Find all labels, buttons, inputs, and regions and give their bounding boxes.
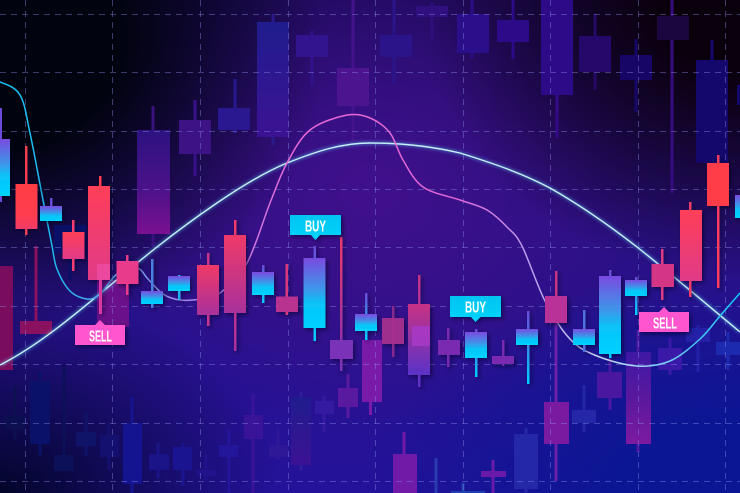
candle: small cyan 2 (141, 259, 163, 308)
candle: right edge cyan (735, 195, 740, 218)
candle: small cyan 1 (40, 198, 62, 221)
candle: magenta short (276, 264, 298, 315)
candle: pink 1 (62, 220, 84, 271)
candle: cyan under second buy (465, 329, 487, 377)
candle: purple short 2 (492, 340, 514, 366)
candle: small cyan 5 (355, 293, 377, 340)
candle: tall red (88, 176, 110, 280)
candle: cyan 4 (252, 265, 274, 303)
moving average curve, long white-cyan (0, 143, 740, 365)
candle: purple short 1 (438, 328, 460, 367)
buy tag over tall candle (290, 215, 341, 240)
label text: SELL: SELL (89, 328, 112, 346)
candle: purple with long red wick (330, 237, 353, 371)
candle: small cyan 7 (573, 310, 595, 352)
label text: SELL: SELL (653, 316, 677, 332)
candle: left edge cyan (0, 108, 10, 202)
sell tag on right side (639, 307, 689, 332)
bright foreground candles (0, 108, 740, 387)
label text: BUY: BUY (305, 218, 326, 236)
candle: magenta mid right (545, 271, 567, 323)
candle: translucent magenta (382, 306, 404, 357)
candle: pink 2 (116, 255, 138, 295)
buy tag on right side (450, 296, 501, 322)
candle: red right 1 (680, 202, 702, 297)
candle: red 1 (16, 146, 38, 235)
dim background candles, lower row (0, 225, 740, 493)
label text: BUY: BUY (465, 300, 486, 316)
candle: small cyan 8 (625, 277, 647, 315)
candle: magenta near sell (652, 249, 674, 300)
moving average curve, cyan to pink (0, 82, 740, 366)
candle: pink-purple 1 (197, 253, 219, 326)
candle: small cyan 6 (516, 311, 538, 384)
candle: tall cyan right (599, 270, 621, 358)
candle: tall pink-purple (224, 220, 246, 351)
candle: tall cyan under buy (304, 246, 326, 341)
candle: tall magenta-purple (408, 275, 430, 387)
candle: small cyan 3 (168, 275, 190, 300)
dim background candles, upper row (137, 0, 740, 247)
candle: pink overlay under sell (97, 264, 110, 314)
sell tag on left side (75, 320, 125, 346)
candle: red right 2 (707, 155, 729, 288)
